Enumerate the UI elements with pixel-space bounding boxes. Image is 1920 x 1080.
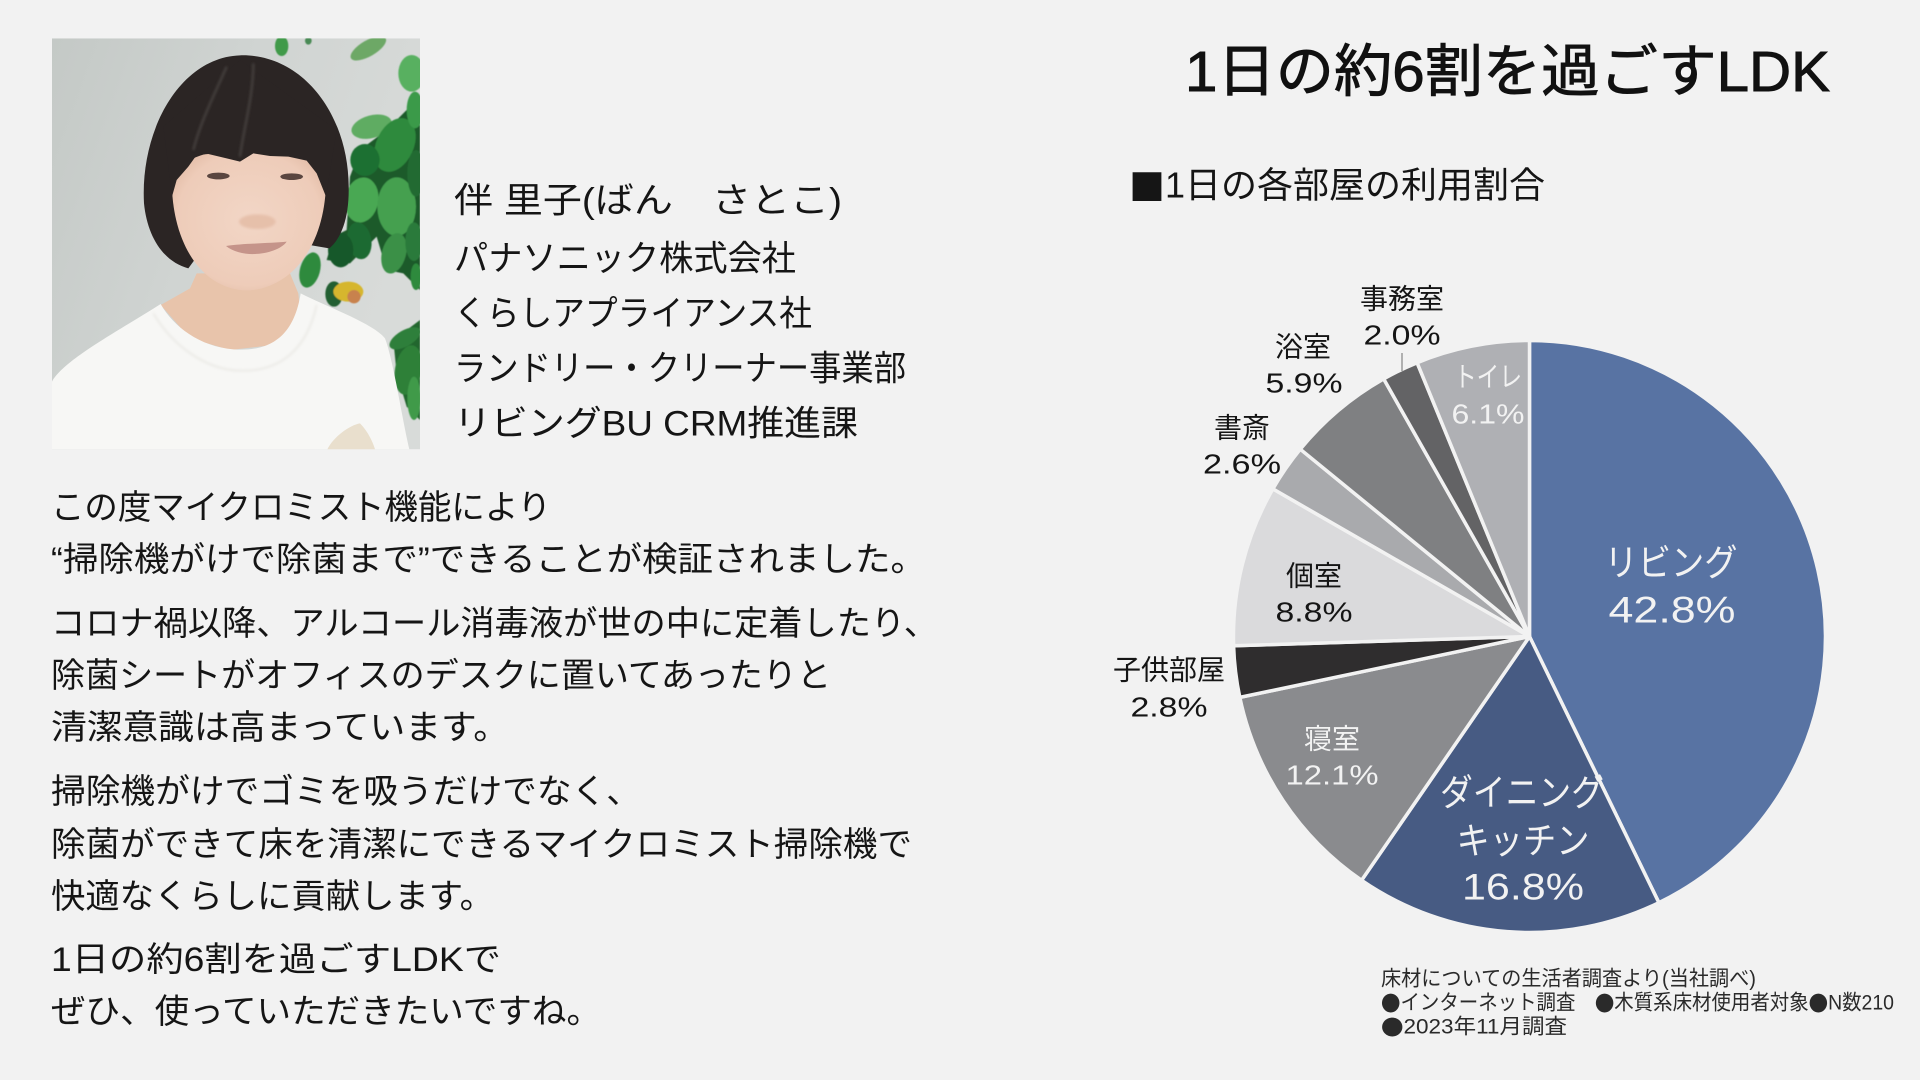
label: private room: 個室 <box>1286 560 1342 592</box>
pie labels <box>1113 284 1738 908</box>
body paragraph 2: 除菌シートがオフィスのデスクに置いてあったりと <box>51 657 831 695</box>
label: bedroom: 12.1% <box>1286 760 1378 790</box>
chart heading: ■1日の各部屋の利用割合 <box>1129 159 1545 211</box>
label: children's room: 子供部屋 <box>1113 654 1225 686</box>
name and affiliation <box>454 182 906 444</box>
face <box>172 147 326 290</box>
body paragraph 2: 清潔意識は高まっています。 <box>51 709 509 747</box>
survey footnote: ●2023年11月調査 <box>1381 1012 1567 1042</box>
slice: dining kitchen <box>1362 636 1659 933</box>
label: bathroom: 5.9% <box>1266 368 1342 398</box>
label: dining kitchen <box>1440 772 1604 908</box>
label: study: 書斎 <box>1214 412 1270 444</box>
label: study <box>1203 412 1281 480</box>
slice: toilet <box>1417 340 1530 636</box>
survey footnote <box>1381 968 1894 1042</box>
body paragraph 4 <box>51 941 601 1031</box>
body paragraph 3: 掃除機がけでゴミを吸うだけでなく、 <box>51 773 641 811</box>
label: bathroom: 浴室 <box>1275 332 1331 362</box>
body paragraph 3: 快適なくらしに貢献します。 <box>51 878 494 916</box>
mouth <box>226 242 287 254</box>
body paragraph 1: “掃除機がけで除菌まで”できることが検証されました。 <box>51 541 926 579</box>
slice: private room <box>1233 489 1530 646</box>
label: toilet: トイレ <box>1454 362 1522 392</box>
label: dining kitchen: 16.8% <box>1462 866 1584 908</box>
hair back <box>144 55 349 268</box>
body paragraph 4: ぜひ、使っていただきたいですね。 <box>51 993 601 1031</box>
body paragraph 1 <box>51 489 926 579</box>
label: dining kitchen: キッチン <box>1456 820 1590 862</box>
label: toilet <box>1452 362 1524 430</box>
label: children's room <box>1113 654 1225 722</box>
label: study: 2.6% <box>1203 448 1281 480</box>
body paragraph 3: 除菌ができて床を清潔にできるマイクロミスト掃除機で <box>51 826 912 864</box>
slice: study <box>1273 449 1530 636</box>
body paragraph 3 <box>51 773 912 916</box>
body paragraph 4: 1日の約6割を過ごすLDKで <box>51 941 501 979</box>
name and affiliation: 伴 里子(ばん さとこ) <box>454 182 842 220</box>
label: living: リビング <box>1604 542 1738 584</box>
pie chart <box>1233 340 1825 933</box>
label: office <box>1360 284 1444 350</box>
slice: bedroom <box>1240 636 1530 880</box>
nose <box>239 214 276 229</box>
slice: living <box>1530 340 1825 903</box>
label: living <box>1604 542 1738 630</box>
slice: office <box>1384 363 1530 636</box>
label: private room <box>1276 560 1352 628</box>
survey footnote: 床材についての生活者調査より(当社調べ) <box>1381 968 1756 990</box>
survey footnote: ●インターネット調査 ●木質系床材使用者対象●N数210 <box>1381 988 1894 1018</box>
label: dining kitchen: ダイニング <box>1440 772 1604 814</box>
portrait photo <box>52 31 426 449</box>
name and affiliation: くらしアプライアンス社 <box>454 294 812 334</box>
leader line: office <box>1401 353 1403 371</box>
shirt <box>52 293 409 449</box>
shirt patch <box>327 423 375 449</box>
label: private room: 8.8% <box>1276 596 1352 628</box>
label: office: 事務室 <box>1360 284 1444 314</box>
name and affiliation: リビングBU CRM推進課 <box>454 404 858 444</box>
slice: children's room <box>1234 636 1530 697</box>
label: bedroom <box>1286 724 1378 790</box>
name and affiliation: パナソニック株式会社 <box>454 240 796 278</box>
title: 1日の約6割を過ごすLDK <box>1185 40 1830 104</box>
bangs <box>172 148 326 196</box>
label: children's room: 2.8% <box>1130 692 1208 722</box>
label: toilet: 6.1% <box>1452 398 1524 430</box>
label: living: 42.8% <box>1608 590 1736 630</box>
name and affiliation: ランドリー・クリーナー事業部 <box>454 350 906 388</box>
label: bedroom: 寝室 <box>1304 724 1360 754</box>
body paragraph 2: コロナ禍以降、アルコール消毒液が世の中に定着したり、 <box>51 605 938 643</box>
label: office: 2.0% <box>1364 320 1440 350</box>
body paragraph 1: この度マイクロミスト機能により <box>51 489 551 527</box>
slice: bathroom <box>1300 379 1530 636</box>
body paragraph 2 <box>51 605 938 747</box>
eyes <box>207 173 230 179</box>
neck <box>161 273 302 350</box>
label: bathroom <box>1266 332 1342 398</box>
